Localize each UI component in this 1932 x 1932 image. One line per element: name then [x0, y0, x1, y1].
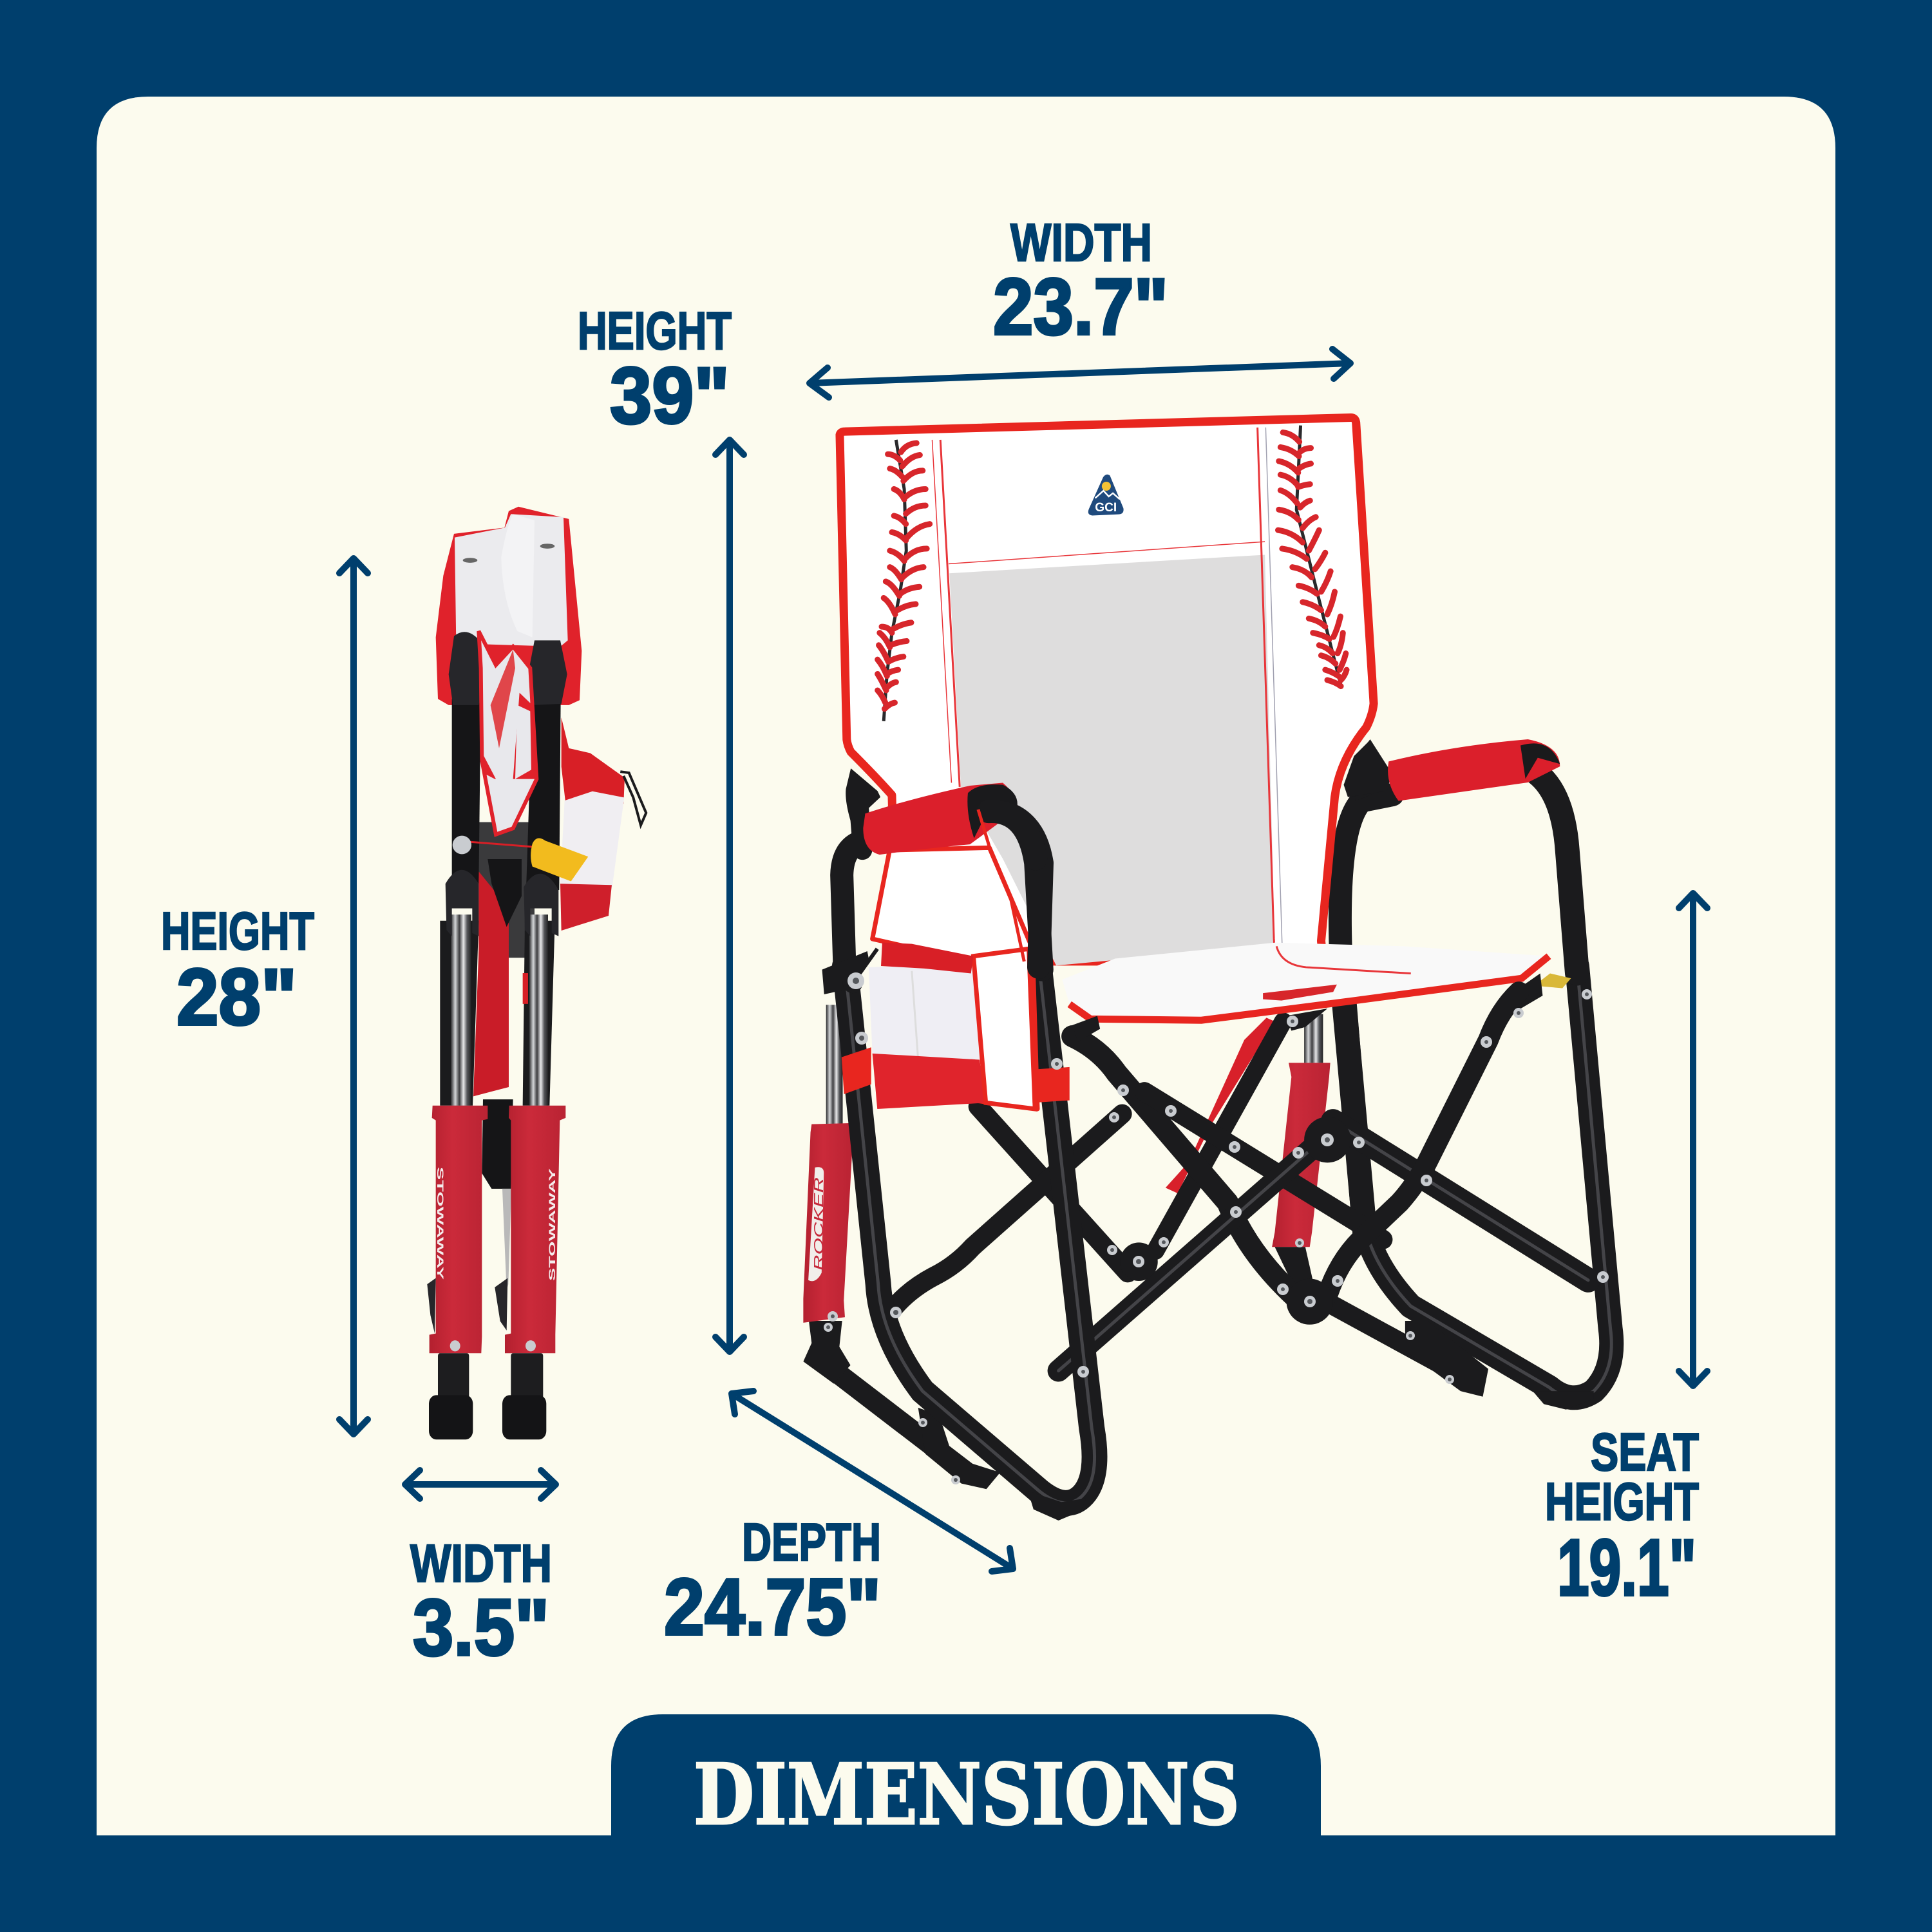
title tab: DIMENSIONS: DIMENSIONS: [694, 1745, 1240, 1844]
rear frame and cross bars: [858, 739, 1611, 1410]
side pocket organizer: [842, 848, 1070, 1109]
label: seat height: [1545, 1422, 1699, 1613]
red cylinder left: [430, 1106, 488, 1353]
arrow: seat height: [1679, 893, 1707, 1386]
chair back fabric: [840, 417, 1410, 974]
cylinder label: ROCKER: ROCKER: [812, 1177, 826, 1271]
seam lines: [932, 440, 1265, 782]
red center panel: [473, 949, 509, 1096]
label: folded width: [410, 1533, 552, 1672]
label: chair height: [578, 301, 732, 440]
label: seat height: SEAT: [1591, 1422, 1699, 1482]
red cylinder right: [505, 1106, 565, 1353]
seat fabric: [1062, 943, 1571, 1020]
logo: GCI badge: GCI: [1095, 501, 1117, 515]
logo: GCI badge: [1088, 474, 1124, 516]
label: folded width: 3.5": [413, 1584, 549, 1672]
armrest front tube over pocket: [989, 810, 1042, 967]
mesh panel: [949, 554, 1274, 965]
label: folded height: HEIGHT: [161, 901, 314, 961]
folded fabric: [436, 507, 582, 705]
cross bars and linkage: [889, 992, 1588, 1371]
cylinder label: STOWAWAY right: STOWAWAY: [547, 1168, 557, 1281]
label: chair depth: DEPTH: [742, 1512, 881, 1572]
title tab: DIMENSIONS: [611, 1714, 1321, 1844]
hardware bolts: [824, 972, 1609, 1484]
baseball lacing right: [1296, 426, 1341, 688]
arrow: folded height: [339, 558, 368, 1434]
label: seat height: 19.1": [1557, 1524, 1696, 1613]
label: chair height: HEIGHT: [578, 301, 732, 361]
label: chair height: 39": [610, 352, 730, 440]
label: chair depth: [664, 1512, 881, 1652]
tag and strap: [470, 842, 533, 847]
label: seat height: HEIGHT: [1545, 1472, 1699, 1531]
arrow: chair width: [810, 349, 1350, 397]
label: folded height: 28": [176, 953, 297, 1042]
label: chair width: [993, 213, 1168, 352]
label: folded width: WIDTH: [410, 1533, 552, 1593]
label: chair width: 23.7": [993, 263, 1168, 352]
feet: [438, 1353, 469, 1399]
armrest left: [863, 782, 1036, 961]
black tubes and hubs: [478, 822, 535, 958]
left arm tubes and brackets: [822, 742, 1391, 994]
photo: folded chair: [427, 507, 646, 1439]
baseball lacing left: [884, 440, 906, 721]
cylinder label: STOWAWAY left: STOWAWAY: [435, 1167, 446, 1280]
arrow: chair depth: [732, 1391, 1013, 1571]
left frame and rocker base: [803, 966, 1095, 1520]
armrest right: [1388, 739, 1560, 801]
crumpled fabric center: [478, 631, 536, 835]
photo: unfolded rocking chair: [803, 417, 1611, 1520]
cup holder: [560, 717, 646, 931]
arrow: folded width: [405, 1470, 556, 1499]
label: chair depth: 24.75": [664, 1563, 881, 1652]
label: folded height: [161, 901, 314, 1042]
arrow: chair height: [715, 440, 744, 1352]
label: chair width: WIDTH: [1010, 213, 1152, 272]
